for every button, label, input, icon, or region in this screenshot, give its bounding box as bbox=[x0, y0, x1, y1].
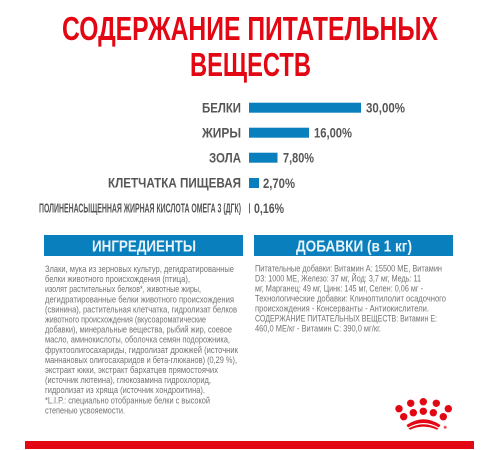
row: omega 3 bbox=[39, 200, 284, 216]
row: fat: 16,00% bbox=[314, 125, 352, 141]
text block: additives list bbox=[255, 264, 446, 335]
footer red bar bbox=[25, 441, 474, 449]
row: omega 3: ПОЛИНЕНАСЫЩЕННАЯ ЖИРНАЯ КИСЛОТА ОМЕГА 3 (ДГК) bbox=[39, 201, 241, 216]
text block: additives list: мг, Марганец: 49 мг, Цинк: 145 мг, Селен: 0,06 мг - bbox=[255, 284, 423, 295]
text block: ingredients list: *L.I.P.: специально отобранные белки с высокой bbox=[45, 395, 210, 406]
text block: ingredients list: экстракт юкки, экстракт бархатцев прямостоячих bbox=[45, 365, 218, 376]
text block: ingredients list: белки животного происхождения (птица), bbox=[45, 274, 190, 285]
bar chart: nutrient content bbox=[39, 100, 405, 216]
text block: ingredients list: животного происхождения (вкусоароматические bbox=[45, 314, 206, 326]
text block: ingredients list: (источник лютеина), глюкозамина гидрохлорид, bbox=[45, 375, 211, 386]
text block: ingredients list: маннановых олигосахаридов и бета-глюканов) (0,29 %), bbox=[45, 355, 237, 366]
text block: ingredients list: Злаки, мука из зерновых культур, дегидратированные bbox=[45, 264, 234, 275]
text block: additives list: 460,0 МЕ/кг - Витамин С: 390,0 мг/кг. bbox=[255, 324, 381, 335]
row: fat bbox=[201, 124, 352, 141]
text block: ingredients list: степенью усвояемости. bbox=[45, 405, 125, 416]
heading: additives bbox=[254, 235, 453, 256]
heading: additives: ДОБАВКИ (в 1 кг) bbox=[296, 239, 412, 256]
text block: ingredients list: изолят растительных белков*, животные жиры, bbox=[45, 284, 201, 295]
text block: additives list: Технологические добавки: Клиноптилолит осадочного bbox=[255, 294, 446, 305]
row: omega 3: 0,16% bbox=[254, 200, 284, 216]
text block: additives list: Питательные добавки: Витамин А: 15500 МЕ, Витамин bbox=[255, 264, 442, 274]
text block: ingredients list: (свинина), растительная клетчатка, гидролизат белков bbox=[45, 304, 237, 315]
row: ash: 7,80% bbox=[283, 150, 314, 166]
heading: ingredients bbox=[44, 235, 243, 256]
title bbox=[62, 10, 438, 83]
icon: royal crown logo bbox=[395, 398, 452, 430]
row: ash bbox=[209, 150, 314, 166]
text block: ingredients list: фруктоолигосахариды, гидролизат дрожжей (источник bbox=[45, 345, 239, 356]
text block: ingredients list bbox=[45, 264, 239, 416]
text block: ingredients list: гидролизат из хряща (источник хондроитина). bbox=[45, 385, 205, 396]
text block: additives list: происхождения - Консерванты - Антиокислители. bbox=[255, 304, 429, 315]
text block: ingredients list: дегидратированные белки животного происхождения bbox=[45, 294, 234, 305]
row: protein bbox=[202, 100, 405, 116]
title: ВЕЩЕСТВ bbox=[190, 46, 311, 83]
row: fibre: КЛЕТЧАТКА ПИЩЕВАЯ bbox=[108, 175, 241, 191]
text block: ingredients list: масло, аминокислоты, оболочка семян подорожника, bbox=[45, 335, 230, 346]
panel: additives bbox=[254, 235, 453, 335]
row: protein: 30,00% bbox=[366, 100, 405, 116]
text block: additives list: СОДЕРЖАНИЕ ПИТАТЕЛЬНЫХ ВЕЩЕСТВ: Витамин Е: bbox=[255, 314, 437, 325]
heading: ingredients: ИНГРЕДИЕНТЫ bbox=[92, 239, 196, 256]
text block: additives list: D3: 1000 МЕ, Железо: 37 мг, Йод: 3,7 мг, Медь: 11 bbox=[255, 272, 421, 284]
panel: ingredients bbox=[44, 235, 243, 416]
row: protein: БЕЛКИ bbox=[202, 100, 241, 116]
text block: ingredients list: добавки), минеральные вещества, рыбий жир, соевое bbox=[45, 325, 232, 336]
row: ash: ЗОЛА bbox=[209, 150, 241, 166]
row: fibre: 2,70% bbox=[263, 175, 295, 191]
row: fat: ЖИРЫ bbox=[201, 124, 241, 140]
